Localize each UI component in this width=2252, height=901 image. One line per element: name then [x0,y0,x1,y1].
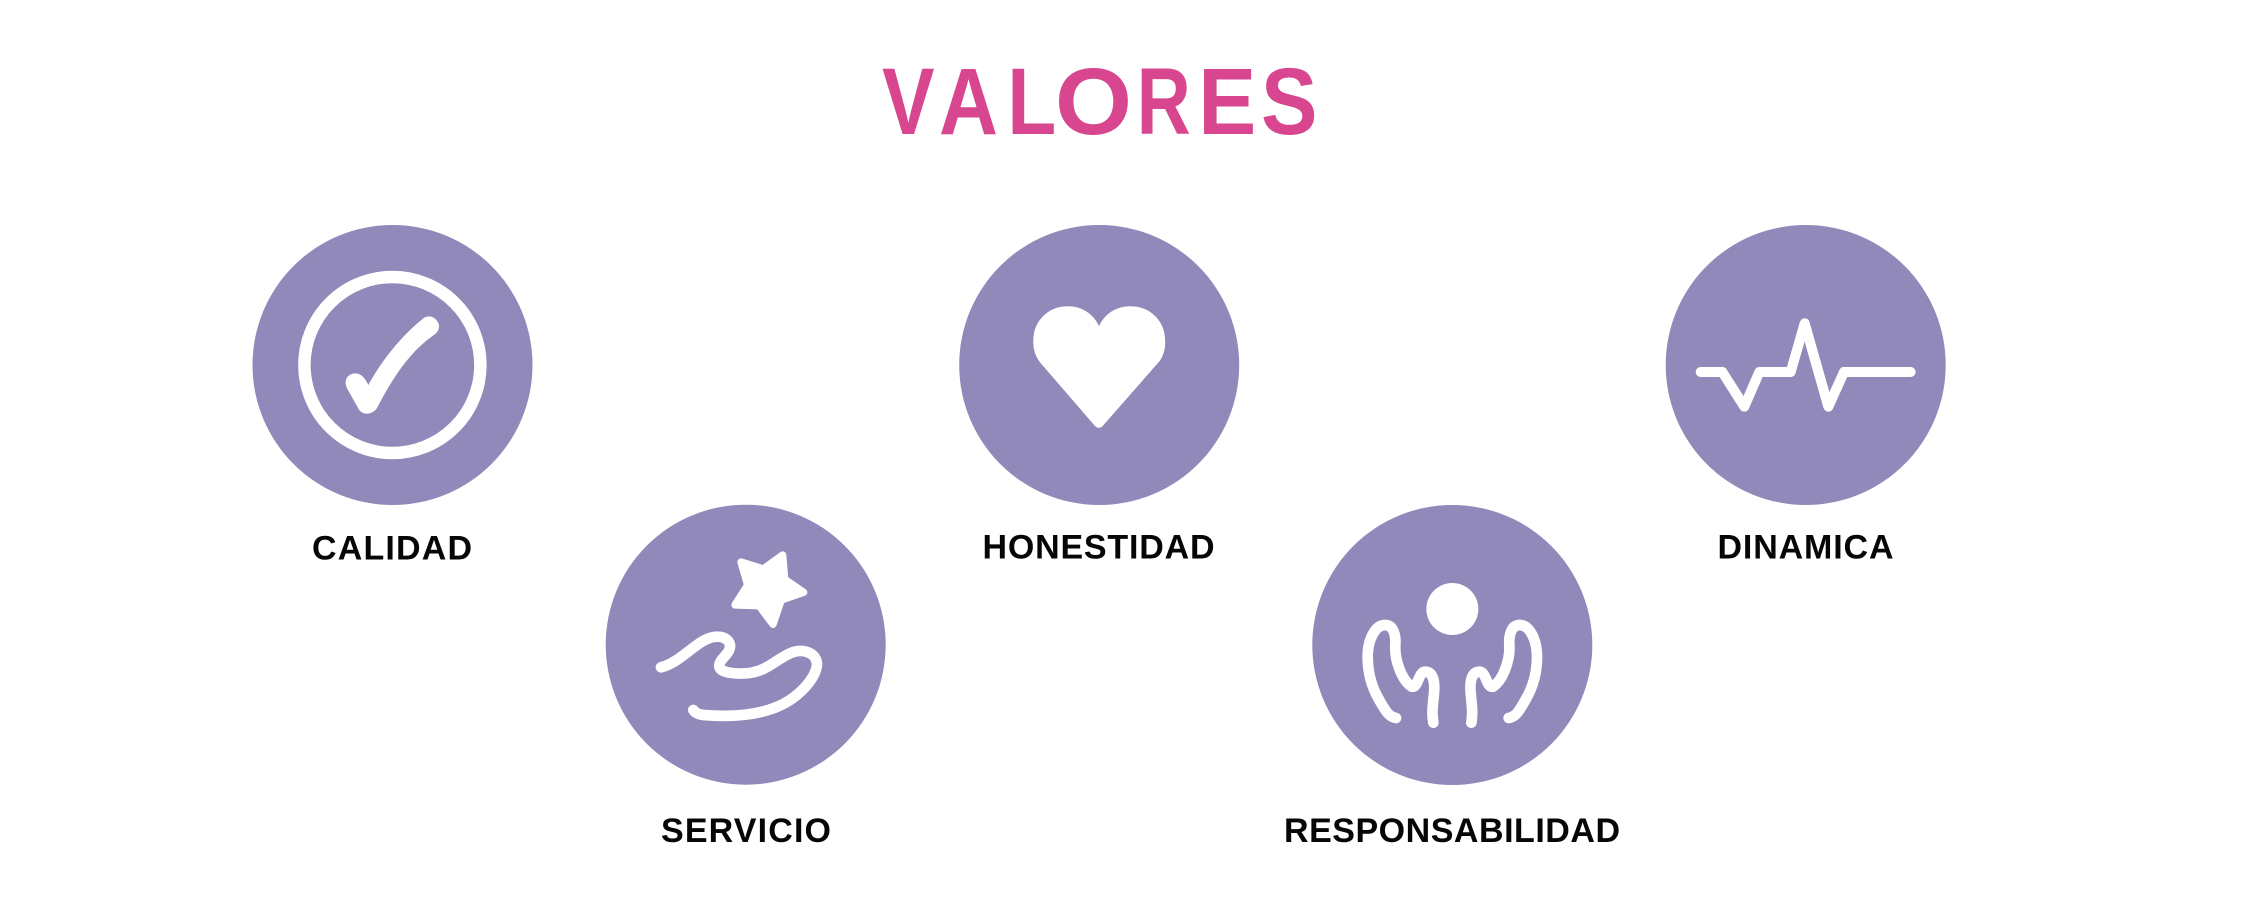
panel: servicio [606,505,886,850]
calidad circle [252,225,532,505]
title: S [1261,49,1318,155]
icon: pulse line [1701,323,1911,407]
dinamica label: DINAMICA [1718,528,1894,566]
honestidad circle [959,225,1239,505]
title: E [1198,49,1256,155]
title: L [1007,49,1056,155]
icon: hands holding person [1368,583,1537,723]
panel: responsabilidad [1284,505,1620,850]
responsabilidad circle [1312,505,1592,785]
responsabilidad label: RESPONSABILIDAD [1284,812,1620,850]
panel: honestidad [959,225,1239,566]
title: O [1055,49,1132,155]
calidad label: CALIDAD [312,530,472,568]
servicio circle [606,505,886,785]
dinamica circle [1666,225,1946,505]
icon: check in ring [304,277,480,453]
honestidad label: HONESTIDAD [982,528,1214,566]
icon: hand with star [661,555,817,716]
panel: dinamica [1666,225,1946,566]
servicio label: SERVICIO [661,812,831,850]
icon: heart [1033,306,1165,428]
title: R [1137,49,1191,155]
title: V [882,49,934,155]
title: A [939,49,998,155]
panel: calidad [252,225,532,568]
